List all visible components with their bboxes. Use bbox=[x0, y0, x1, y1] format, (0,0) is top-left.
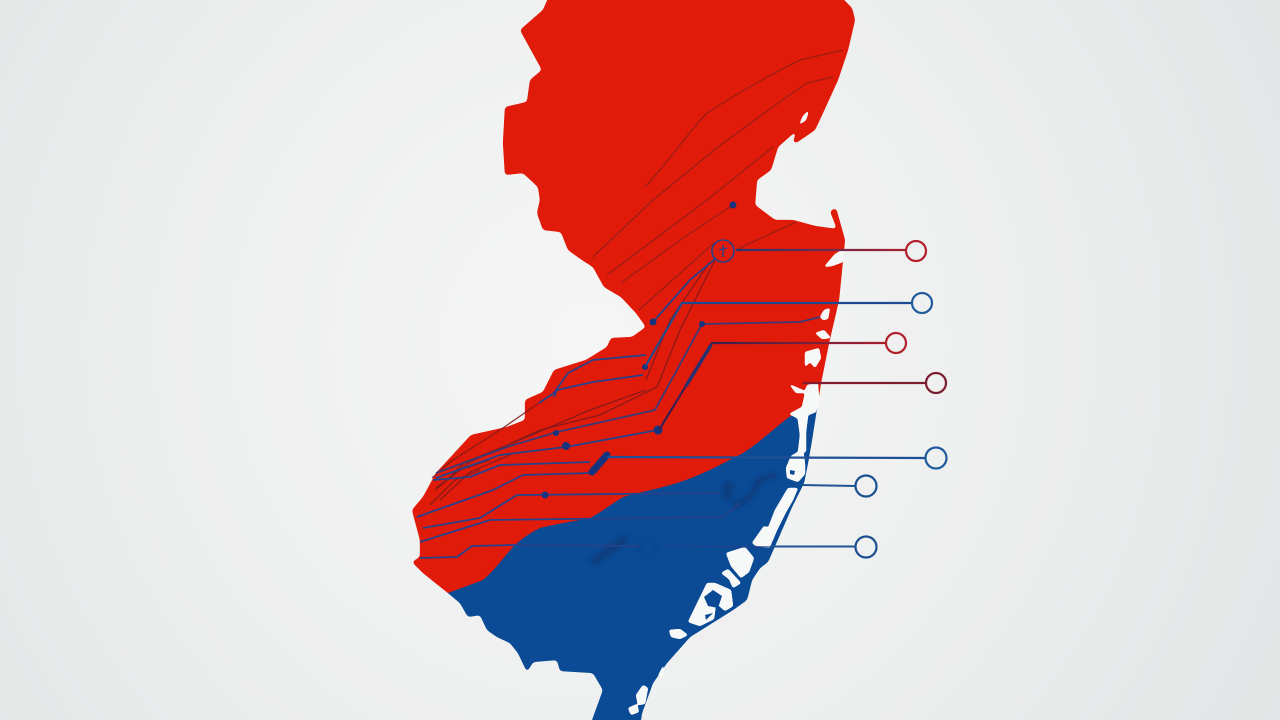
contour lines: north thin dark red bbox=[593, 50, 843, 310]
coast: white lagoons and inlets bbox=[628, 110, 844, 715]
state fill: red and blue regions bbox=[412, 0, 855, 720]
infographic canvas bbox=[412, 0, 1280, 720]
callout 7: blue marker bbox=[770, 536, 876, 558]
shading: ghost marks on blue bbox=[591, 475, 777, 563]
region: red lower band bbox=[412, 390, 820, 594]
callout 2: blue marker bbox=[645, 293, 932, 367]
region: blue south bbox=[448, 408, 818, 720]
callout 6: blue marker bbox=[802, 476, 876, 496]
route lines: blue circuit traces bbox=[417, 258, 820, 558]
callout 1: red marker top bbox=[712, 240, 926, 262]
region: red north and central bbox=[502, 0, 855, 380]
callout 3: red marker bbox=[659, 333, 906, 430]
route nodes bbox=[542, 202, 736, 498]
callout 5: blue marker bbox=[607, 448, 946, 468]
contour lines: west tip hatching bbox=[430, 258, 716, 505]
coast: blue inner marks in lagoons bbox=[704, 470, 795, 620]
callout 4: dark red marker bbox=[803, 373, 946, 393]
map: New Jersey state shape bbox=[412, 0, 855, 720]
